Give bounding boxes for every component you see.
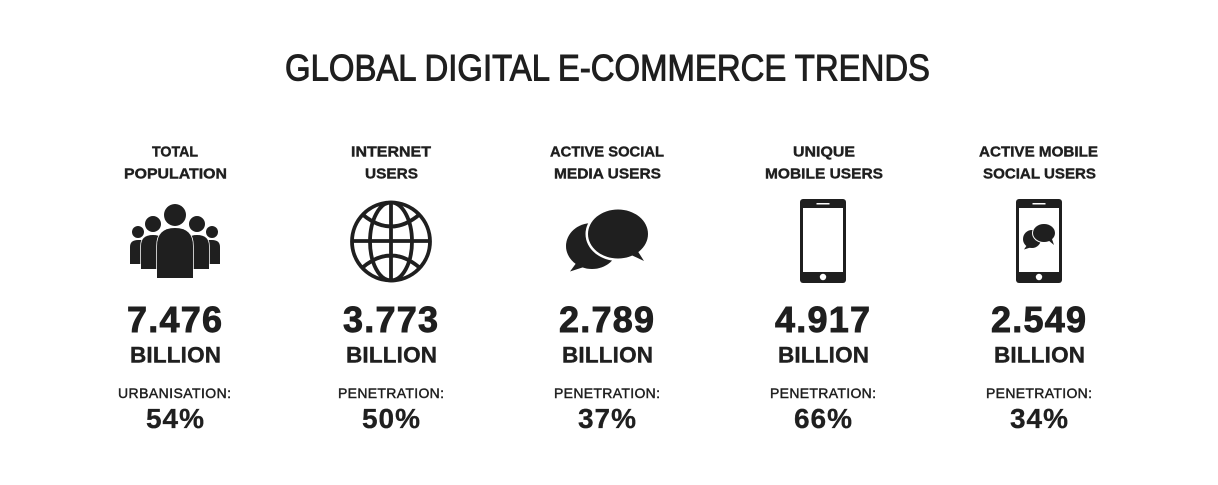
value: 3.773 billion: 3.773 bbox=[343, 299, 438, 340]
panel: active mobile social users bbox=[979, 144, 1098, 434]
stat: penetration 50%: 50% bbox=[362, 403, 420, 434]
icon: globe bbox=[352, 202, 430, 281]
value: 4.917 billion: BILLION bbox=[778, 342, 869, 368]
stat: penetration 50%: PENETRATION: bbox=[338, 385, 444, 401]
stat: penetration 37%: PENETRATION: bbox=[554, 385, 660, 401]
stat: penetration 37%: 37% bbox=[578, 403, 636, 434]
panel: total population bbox=[118, 144, 231, 434]
heading: total population: POPULATION bbox=[124, 166, 227, 182]
heading: total population bbox=[124, 144, 227, 182]
stat: penetration 66%: 66% bbox=[794, 403, 852, 434]
stat: penetration 34%: 34% bbox=[1010, 403, 1068, 434]
title: GLOBAL DIGITAL E-COMMERCE TRENDS bbox=[285, 48, 930, 88]
stat: penetration 66%: PENETRATION: bbox=[770, 385, 876, 401]
stat: urbanisation 54%: URBANISATION: bbox=[118, 385, 231, 401]
heading: total population: TOTAL bbox=[152, 144, 198, 160]
icon: smartphone with speech bubbles bbox=[1016, 199, 1062, 283]
value: 3.773 billion: BILLION bbox=[346, 342, 437, 368]
value: 2.789 billion: BILLION bbox=[562, 342, 653, 368]
heading: active mobile social users: ACTIVE MOBILE bbox=[979, 144, 1098, 160]
stat: penetration 34%: PENETRATION: bbox=[986, 385, 1092, 401]
stat: penetration 37% bbox=[554, 385, 660, 434]
panel: internet users bbox=[338, 144, 444, 434]
heading: unique mobile users bbox=[765, 144, 883, 182]
heading: internet users bbox=[351, 144, 431, 182]
heading: unique mobile users: MOBILE USERS bbox=[765, 166, 883, 182]
heading: active mobile social users: SOCIAL USERS bbox=[983, 166, 1096, 182]
heading: unique mobile users: UNIQUE bbox=[793, 144, 855, 160]
stat: urbanisation 54% bbox=[118, 385, 231, 434]
icon: smartphone bbox=[800, 199, 846, 283]
panel: unique mobile users bbox=[765, 144, 883, 434]
value: 3.773 billion bbox=[343, 299, 438, 368]
value: 2.549 billion: BILLION bbox=[994, 342, 1085, 368]
stat: penetration 34% bbox=[986, 385, 1092, 434]
value: 4.917 billion: 4.917 bbox=[775, 299, 870, 340]
value: 7.476 billion bbox=[127, 299, 222, 368]
heading: internet users: USERS bbox=[365, 166, 418, 182]
icon: speech bubbles bbox=[566, 207, 650, 272]
heading: active social media users bbox=[550, 144, 664, 182]
value: 2.789 billion bbox=[559, 299, 654, 368]
panel: active social media users bbox=[550, 144, 664, 434]
icon: people group bbox=[130, 204, 220, 278]
stat: penetration 50% bbox=[338, 385, 444, 434]
stat: urbanisation 54%: 54% bbox=[146, 403, 204, 434]
heading: internet users: INTERNET bbox=[351, 144, 431, 160]
value: 2.549 billion bbox=[991, 299, 1086, 368]
value: 2.789 billion: 2.789 bbox=[559, 299, 654, 340]
stat: penetration 66% bbox=[770, 385, 876, 434]
heading: active social media users: ACTIVE SOCIAL bbox=[550, 144, 664, 160]
heading: active social media users: MEDIA USERS bbox=[554, 166, 661, 182]
value: 7.476 billion: BILLION bbox=[130, 342, 221, 368]
heading: active mobile social users bbox=[979, 144, 1098, 182]
value: 2.549 billion: 2.549 bbox=[991, 299, 1086, 340]
value: 4.917 billion bbox=[775, 299, 870, 368]
value: 7.476 billion: 7.476 bbox=[127, 299, 222, 340]
